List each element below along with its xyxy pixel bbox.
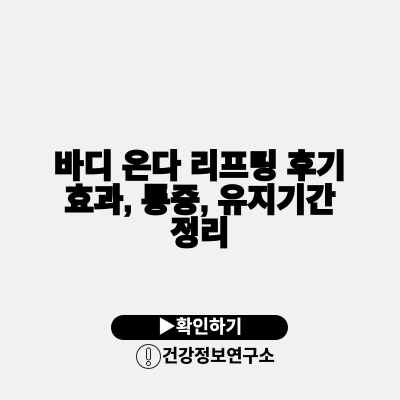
title [54,148,346,251]
brand name: 건강정보연구소 [162,346,275,366]
icon: exclamation circle [136,344,161,369]
button: 확인하기 [111,315,288,340]
title: 효과, 통증, 유지기간 [64,182,336,218]
button: 확인하기: ▶확인하기 [158,317,242,337]
title: 정리 [171,215,229,251]
title: 바디 온다 리프팅 후기 [54,148,346,184]
